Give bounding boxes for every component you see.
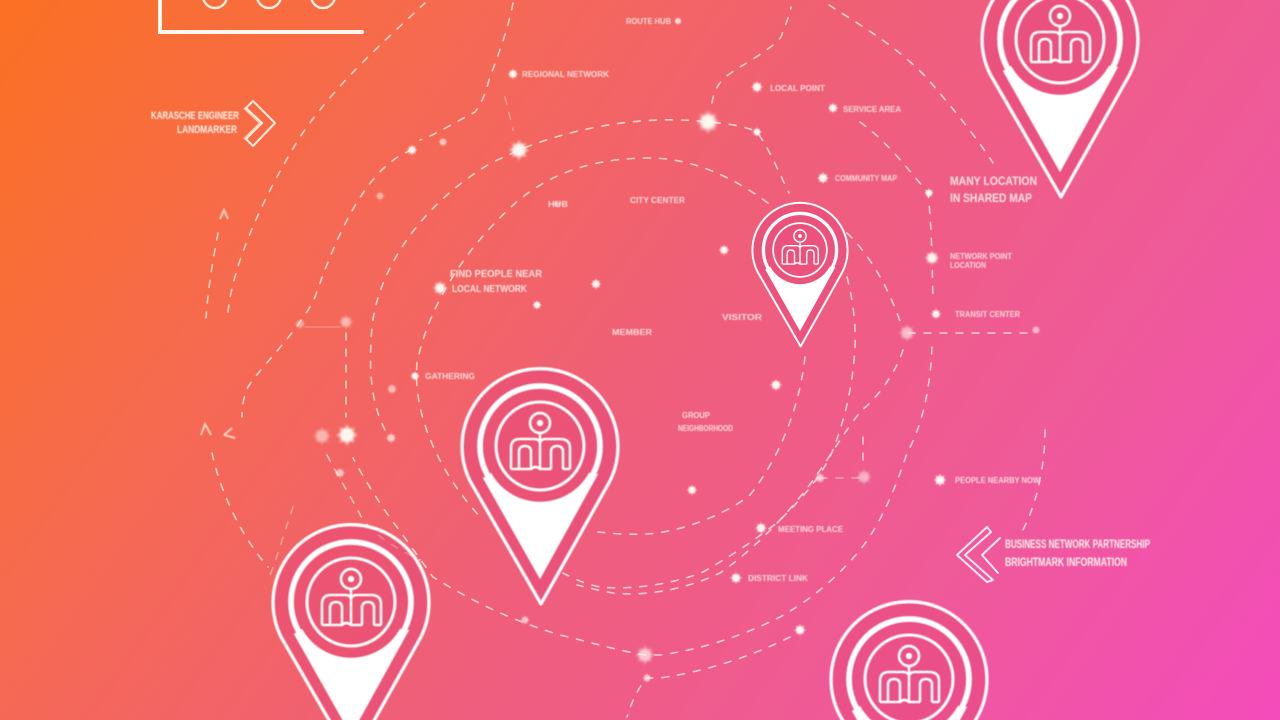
label: upper right text block: MANY LOCATION [950, 174, 1037, 188]
location nodes [295, 17, 1040, 682]
small node labels: NETWORK POINT [950, 252, 1012, 261]
icon: small middle location pin [752, 203, 848, 346]
label: lower right callout text: BUSINESS NETWORK PARTNERSHIP [1005, 539, 1150, 551]
label: upper left callout text: LANDMARKER [177, 124, 237, 136]
small node labels [425, 17, 1040, 583]
small node labels: DISTRICT LINK [748, 574, 808, 583]
icon: central location pin [462, 369, 618, 604]
small node labels: SERVICE AREA [843, 105, 901, 114]
icon: lower left location pin [273, 525, 429, 720]
small node labels: MEETING PLACE [778, 525, 844, 534]
label: upper right text block [950, 174, 1037, 205]
label: centre left text block [450, 269, 543, 295]
panel: top-left frame with circles [160, 0, 362, 32]
label: lower right callout text: BRIGHTMARK INFORMATION [1005, 557, 1127, 569]
arrow: upper left double chevron [244, 101, 275, 146]
small node labels: VISITOR [722, 313, 762, 322]
small node labels: TRANSIT CENTER [955, 310, 1020, 319]
small node labels: NEIGHBORHOOD [678, 424, 733, 433]
small node labels: PEOPLE NEARBY NOW [955, 476, 1040, 485]
label: centre left text block: LOCAL NETWORK [452, 284, 528, 295]
small node labels: COMMUNITY MAP [835, 174, 898, 183]
small node labels: MEMBER [612, 328, 652, 337]
small node labels: LOCATION [950, 261, 986, 270]
icon: top right location pin [982, 0, 1138, 197]
small node labels: LOCAL POINT [770, 84, 825, 93]
label: upper left callout text: KARASCHE ENGINEER [151, 110, 239, 122]
small triangle markers [201, 210, 235, 438]
icon: lower right location pin [831, 602, 987, 720]
small node labels: REGIONAL NETWORK [522, 70, 609, 79]
arrow: lower right double chevron [957, 527, 1000, 582]
label: upper left callout text [151, 110, 239, 136]
small node labels: CITY CENTER [630, 196, 685, 205]
dashed route network [206, 3, 1045, 717]
small node labels: GATHERING [425, 372, 475, 381]
label: centre left text block: FIND PEOPLE NEAR [450, 269, 543, 280]
small node labels: ROUTE HUB [626, 17, 671, 26]
small node labels: HUB [548, 200, 568, 209]
label: upper right text block: IN SHARED MAP [950, 191, 1032, 205]
small node labels: GROUP [682, 411, 711, 420]
label: lower right callout text [1005, 539, 1150, 569]
